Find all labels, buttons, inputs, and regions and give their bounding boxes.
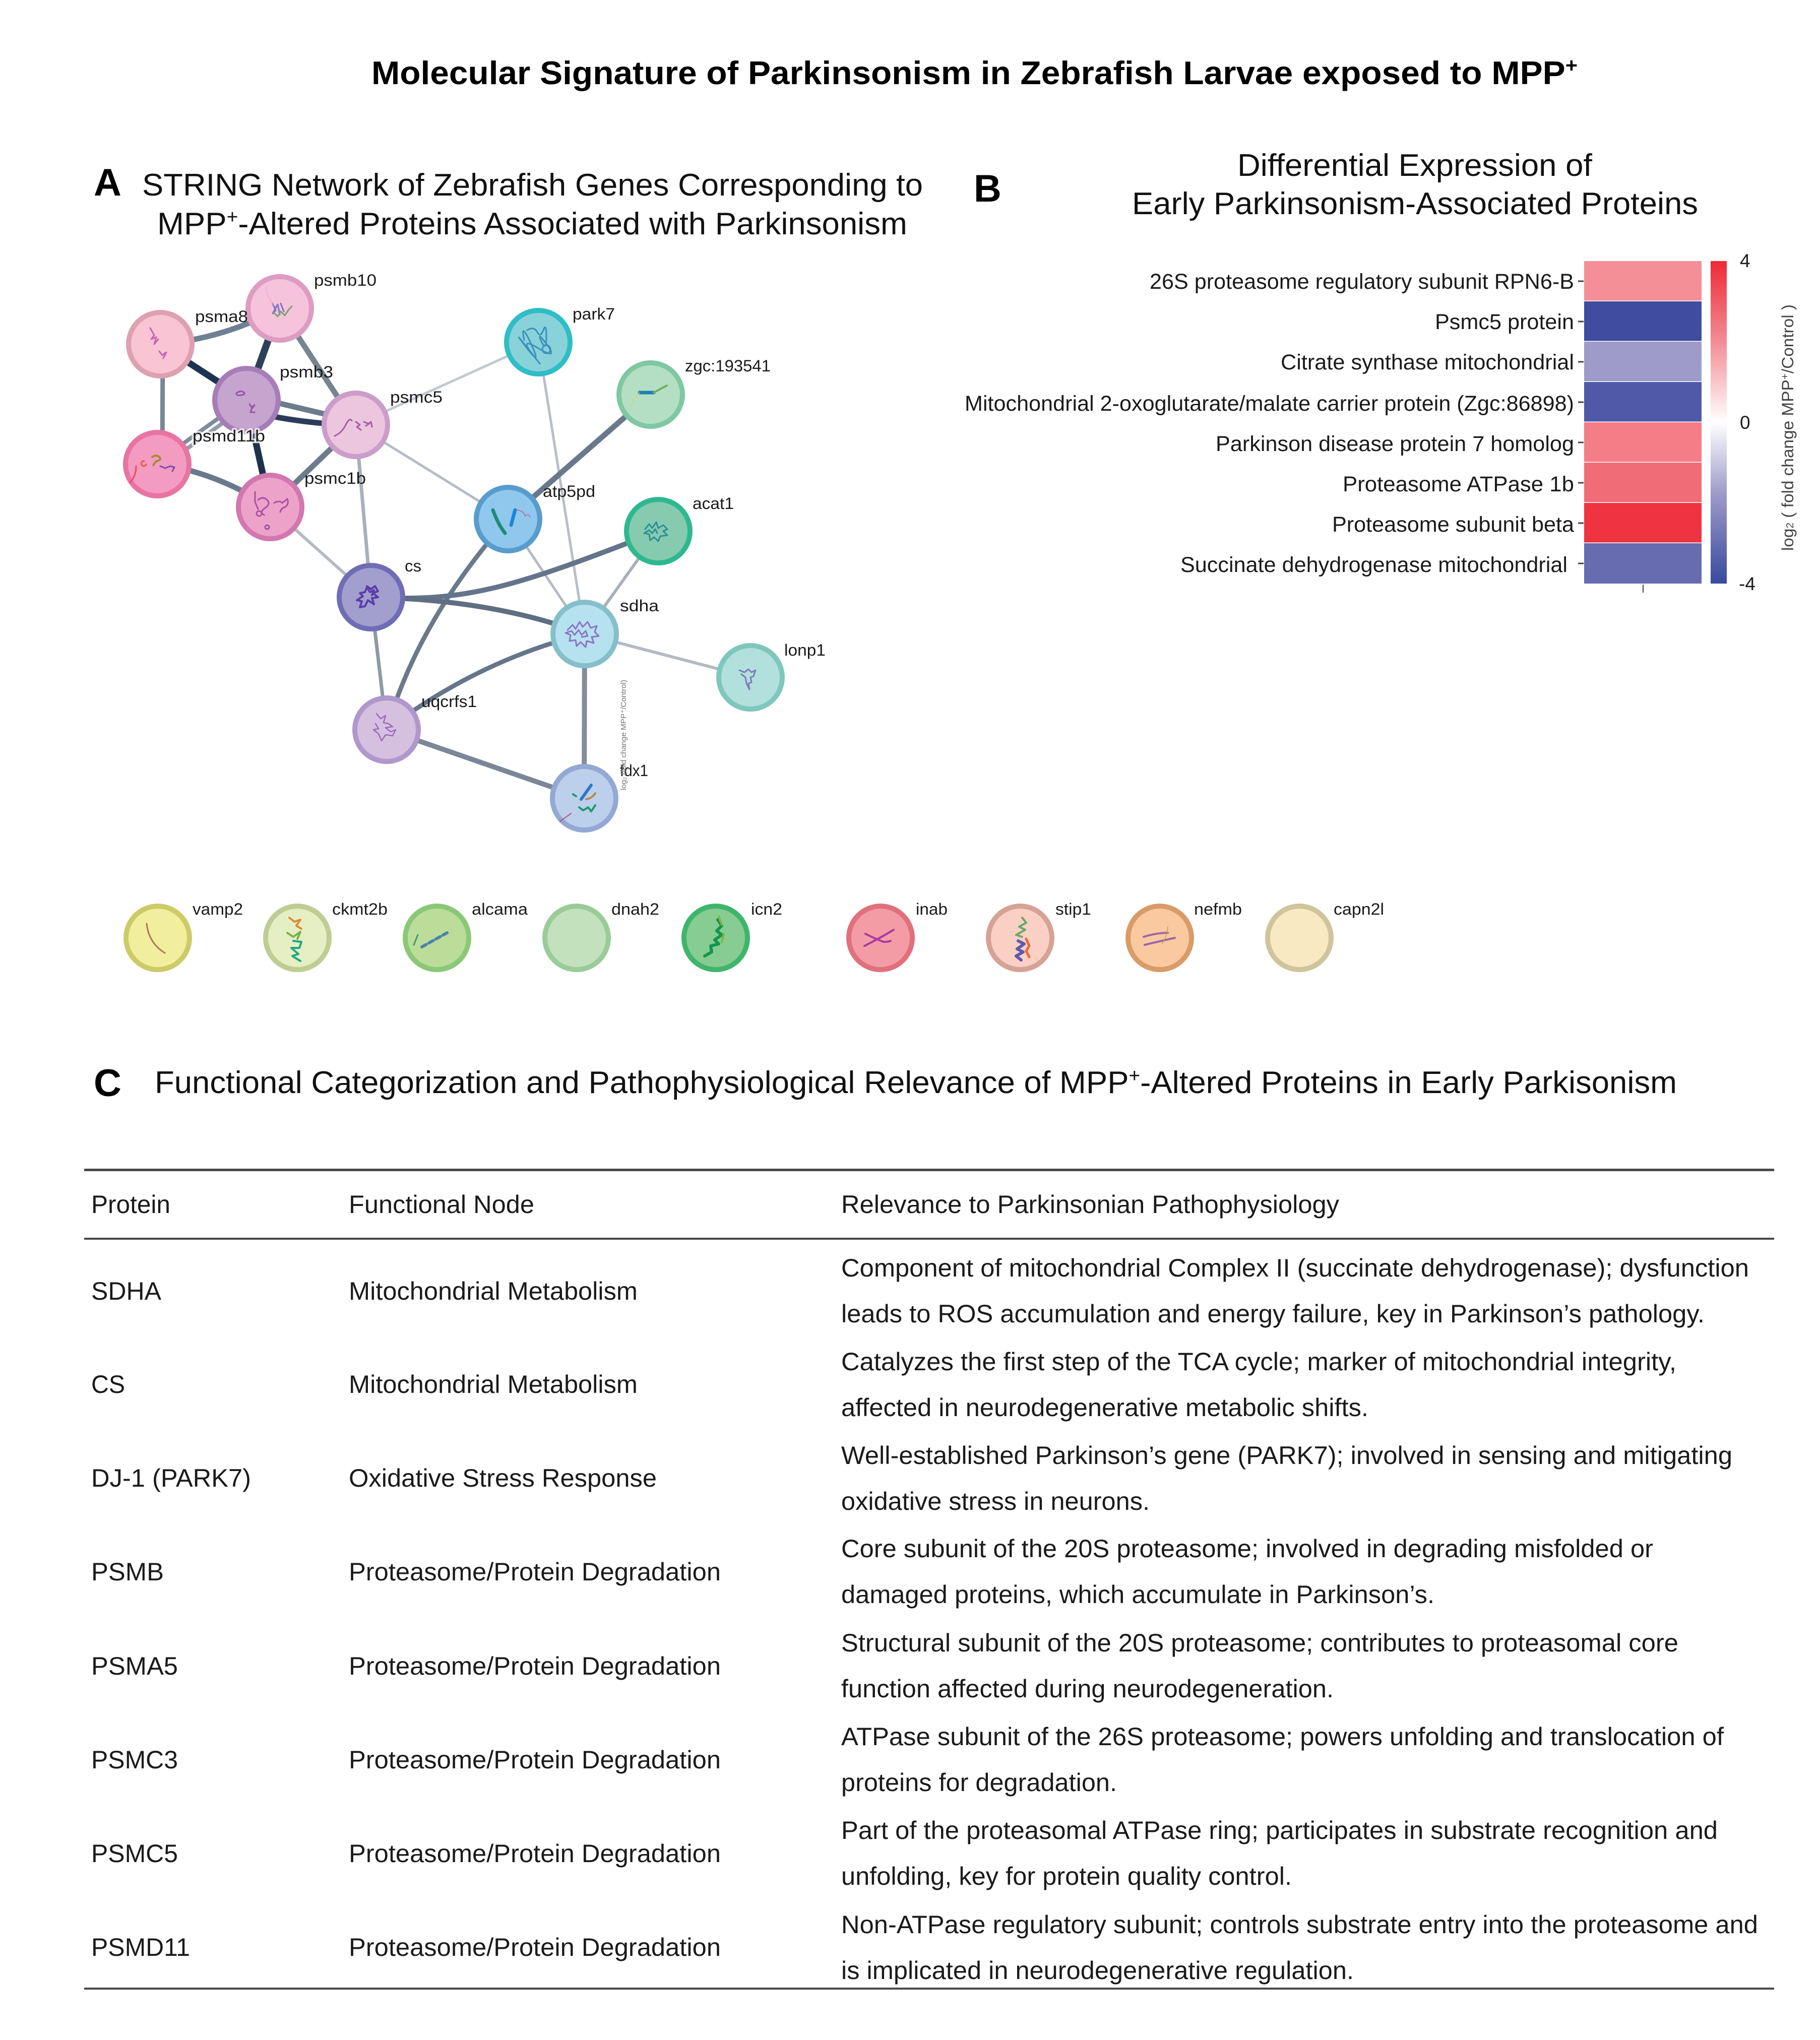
node: stip1 bbox=[988, 900, 1091, 970]
table header: Relevance to Parkinsonian Pathophysiology bbox=[841, 1190, 1339, 1219]
node: psma8: psma8 bbox=[195, 307, 248, 326]
colour scale legend bbox=[1711, 250, 1797, 594]
row: PSMB: damaged proteins, which accumulate in Parkinson’s. bbox=[841, 1580, 1434, 1609]
colour scale legend: + bbox=[1780, 373, 1791, 379]
heading: panel A bbox=[142, 168, 923, 241]
row: PSMC5: PSMC5 bbox=[91, 1839, 178, 1868]
row: PSMB: Proteasome/Protein Degradation bbox=[349, 1558, 721, 1586]
node: psmb10: psmb10 bbox=[314, 271, 376, 289]
node: dnah2 bbox=[545, 900, 659, 970]
row: SDHA bbox=[91, 1254, 1749, 1328]
row: PSMD11: PSMD11 bbox=[91, 1933, 190, 1961]
row: PSMD11: Proteasome/Protein Degradation bbox=[349, 1933, 721, 1961]
row: CS: Catalyzes the first step of the TCA cycle; marker of mitochondrial integrity, bbox=[841, 1348, 1676, 1376]
node: psmc5 bbox=[324, 388, 443, 457]
heading: panel C: + bbox=[1129, 1065, 1140, 1087]
row: SDHA: SDHA bbox=[91, 1277, 162, 1305]
node: ckmt2b bbox=[266, 900, 388, 970]
row: PSMC5 bbox=[91, 1816, 1718, 1890]
node: fdx1: fdx1 bbox=[620, 761, 648, 780]
node: psmb3: psmb3 bbox=[280, 363, 333, 381]
row: PSMC5: unfolding, key for protein quality control. bbox=[841, 1862, 1292, 1890]
node: acat1 bbox=[626, 494, 734, 563]
heading: panel B: Early Parkinsonism-Associated Proteins bbox=[1132, 186, 1698, 221]
row: PSMC5: Part of the proteasomal ATPase ring; participates in substrate recognition and bbox=[841, 1816, 1718, 1844]
node: psma8 bbox=[129, 307, 248, 376]
colour scale legend: -4 bbox=[1739, 573, 1755, 594]
node: nefmb: nefmb bbox=[1194, 900, 1242, 918]
heatmap ticks bbox=[1578, 281, 1643, 593]
row: DJ-1: Well-established Parkinson’s gene (PARK7); involved in sensing and mitigating bbox=[841, 1441, 1732, 1470]
network edges bbox=[157, 308, 750, 798]
row: PSMB: Core subunit of the 20S proteasome; involved in degrading misfolded or bbox=[841, 1535, 1653, 1563]
node: sdha bbox=[553, 597, 659, 666]
node: atp5pd: atp5pd bbox=[543, 482, 595, 500]
node: lonp1 bbox=[719, 641, 826, 709]
heading: panel A: + bbox=[227, 207, 238, 228]
table header: Functional Node bbox=[349, 1190, 534, 1219]
row: PSMA5: function affected during neurodegeneration. bbox=[841, 1675, 1334, 1703]
row: PSMC3: PSMC3 bbox=[91, 1746, 178, 1774]
panel letter A: A bbox=[94, 161, 121, 204]
node: psmb3 bbox=[215, 363, 333, 432]
node: acat1: acat1 bbox=[693, 494, 734, 513]
node: vamp2: vamp2 bbox=[193, 900, 243, 918]
heatmap row labels: Proteasome ATPase 1b bbox=[1343, 472, 1574, 496]
node: zgc:193541: zgc:193541 bbox=[685, 357, 771, 375]
panel C: table bbox=[84, 1062, 1774, 1990]
heatmap row labels: Citrate synthase mitochondrial bbox=[1281, 350, 1574, 374]
heatmap row labels: Succinate dehydrogenase mitochondrial bbox=[1180, 553, 1567, 577]
node: alcama: alcama bbox=[472, 900, 528, 918]
heatmap row labels: 26S proteasome regulatory subunit RPN6-B bbox=[1150, 270, 1574, 294]
heading: panel A: MPP bbox=[157, 207, 225, 241]
node: psmd11b: psmd11b bbox=[193, 427, 265, 445]
node: inab bbox=[849, 900, 948, 970]
node: nefmb bbox=[1128, 900, 1242, 970]
row: PSMC3: ATPase subunit of the 26S proteasome; powers unfolding and translocation of bbox=[841, 1723, 1724, 1751]
node: park7 bbox=[507, 305, 615, 374]
row: PSMC3 bbox=[91, 1723, 1724, 1797]
node: sdha: sdha bbox=[620, 597, 659, 615]
node: zgc:193541 bbox=[619, 357, 771, 426]
node: ckmt2b: ckmt2b bbox=[332, 900, 388, 918]
node: inab: inab bbox=[916, 900, 948, 918]
row: CS: Mitochondrial Metabolism bbox=[349, 1370, 638, 1398]
node: psmd11b bbox=[125, 427, 265, 496]
node: dnah2: dnah2 bbox=[611, 900, 659, 918]
heading: panel B bbox=[1132, 148, 1698, 221]
node: psmb10 bbox=[248, 271, 376, 340]
table header: Protein bbox=[91, 1190, 170, 1219]
heatmap row labels: Parkinson disease protein 7 homolog bbox=[1216, 432, 1574, 456]
node: psmc1b bbox=[238, 469, 366, 539]
row: DJ-1 bbox=[91, 1441, 1732, 1515]
heatmap cells bbox=[1584, 261, 1702, 584]
row: PSMB bbox=[91, 1535, 1653, 1609]
panel A: STRING network bbox=[94, 161, 923, 830]
heatmap row labels bbox=[965, 270, 1574, 577]
node: cs bbox=[339, 557, 421, 629]
node: psmc1b: psmc1b bbox=[304, 469, 366, 487]
node: uqcrfs1: uqcrfs1 bbox=[421, 692, 477, 711]
row: CS: CS bbox=[91, 1370, 125, 1398]
row: PSMD11: is implicated in neurodegenerative regulation. bbox=[841, 1956, 1354, 1985]
row: PSMD11 bbox=[91, 1910, 1758, 1985]
heading: panel C: Functional Categorization and Pathophysiological Relevance of MPP bbox=[155, 1065, 1107, 1100]
row: DJ-1: Oxidative Stress Response bbox=[349, 1464, 657, 1492]
heatmap row labels: Mitochondrial 2-oxoglutarate/malate carrier protein (Zgc:86898) bbox=[965, 392, 1574, 416]
row: DJ-1: oxidative stress in neurons. bbox=[841, 1487, 1150, 1515]
heatmap row labels: Psmc5 protein bbox=[1435, 310, 1574, 334]
node: cs: cs bbox=[405, 557, 421, 575]
panel letter B: B bbox=[974, 167, 1001, 210]
panel B: heatmap bbox=[965, 148, 1797, 594]
heading: panel A: STRING Network of Zebrafish Genes Corresponding to bbox=[142, 168, 923, 203]
row: SDHA: leads to ROS accumulation and energy failure, key in Parkinson’s pathology. bbox=[841, 1300, 1705, 1328]
row: DJ-1: DJ-1 (PARK7) bbox=[91, 1464, 251, 1492]
node: uqcrfs1 bbox=[355, 692, 477, 761]
node: psmc5: psmc5 bbox=[390, 388, 443, 406]
colour scale legend: 0 bbox=[1740, 412, 1750, 433]
row: SDHA: Component of mitochondrial Complex II (succinate dehydrogenase); dysfunction bbox=[841, 1254, 1749, 1282]
faint stray colorbar label: log₂ (fold change MPP⁺/Control) bbox=[619, 680, 628, 790]
row: PSMC3: proteins for degradation. bbox=[841, 1768, 1117, 1797]
row: SDHA: Mitochondrial Metabolism bbox=[349, 1277, 638, 1305]
title: + bbox=[1565, 54, 1578, 77]
table rules bbox=[84, 1169, 1774, 1990]
row: PSMD11: Non-ATPase regulatory subunit; controls substrate entry into the proteasome and bbox=[841, 1910, 1758, 1939]
panel letter C: C bbox=[94, 1062, 121, 1105]
node: capn2l: capn2l bbox=[1334, 900, 1384, 918]
node: icn2 bbox=[684, 900, 782, 970]
colour scale legend: /Control ) bbox=[1779, 304, 1797, 373]
row: PSMA5: Structural subunit of the 20S proteasome; contributes to proteasomal core bbox=[841, 1629, 1678, 1657]
node: fdx1 bbox=[552, 761, 648, 830]
heatmap row labels: Proteasome subunit beta bbox=[1332, 513, 1574, 537]
heading: panel B: Differential Expression of bbox=[1237, 148, 1593, 183]
colour scale legend: 4 bbox=[1740, 250, 1750, 271]
unconnected nodes row bbox=[126, 900, 1384, 970]
node: park7: park7 bbox=[573, 305, 615, 323]
node: alcama bbox=[405, 900, 528, 970]
row: PSMC3: Proteasome/Protein Degradation bbox=[349, 1746, 721, 1774]
heading: panel C: -Altered Proteins in Early Parkisonism bbox=[1140, 1065, 1677, 1100]
row: PSMA5 bbox=[91, 1629, 1678, 1703]
row: PSMA5: Proteasome/Protein Degradation bbox=[349, 1652, 721, 1680]
row: CS bbox=[91, 1348, 1676, 1422]
colour scale legend: log2 ( fold change MPP bbox=[1779, 386, 1797, 551]
node: atp5pd bbox=[476, 482, 595, 551]
table header bbox=[91, 1190, 1339, 1219]
node: lonp1: lonp1 bbox=[784, 641, 826, 659]
heading: panel A: -Altered Proteins Associated with Parkinsonism bbox=[238, 207, 907, 241]
row: PSMB: PSMB bbox=[91, 1558, 164, 1586]
row: CS: affected in neurodegenerative metabolic shifts. bbox=[841, 1393, 1368, 1422]
row: PSMA5: PSMA5 bbox=[91, 1652, 178, 1680]
title: Molecular Signature of Parkinsonism in Zebrafish Larvae exposed to MPP bbox=[371, 54, 1520, 91]
node: stip1: stip1 bbox=[1055, 900, 1091, 918]
row: PSMC5: Proteasome/Protein Degradation bbox=[349, 1839, 721, 1868]
node: vamp2 bbox=[126, 900, 243, 970]
node: icn2: icn2 bbox=[751, 900, 782, 918]
node: capn2l bbox=[1268, 900, 1384, 970]
